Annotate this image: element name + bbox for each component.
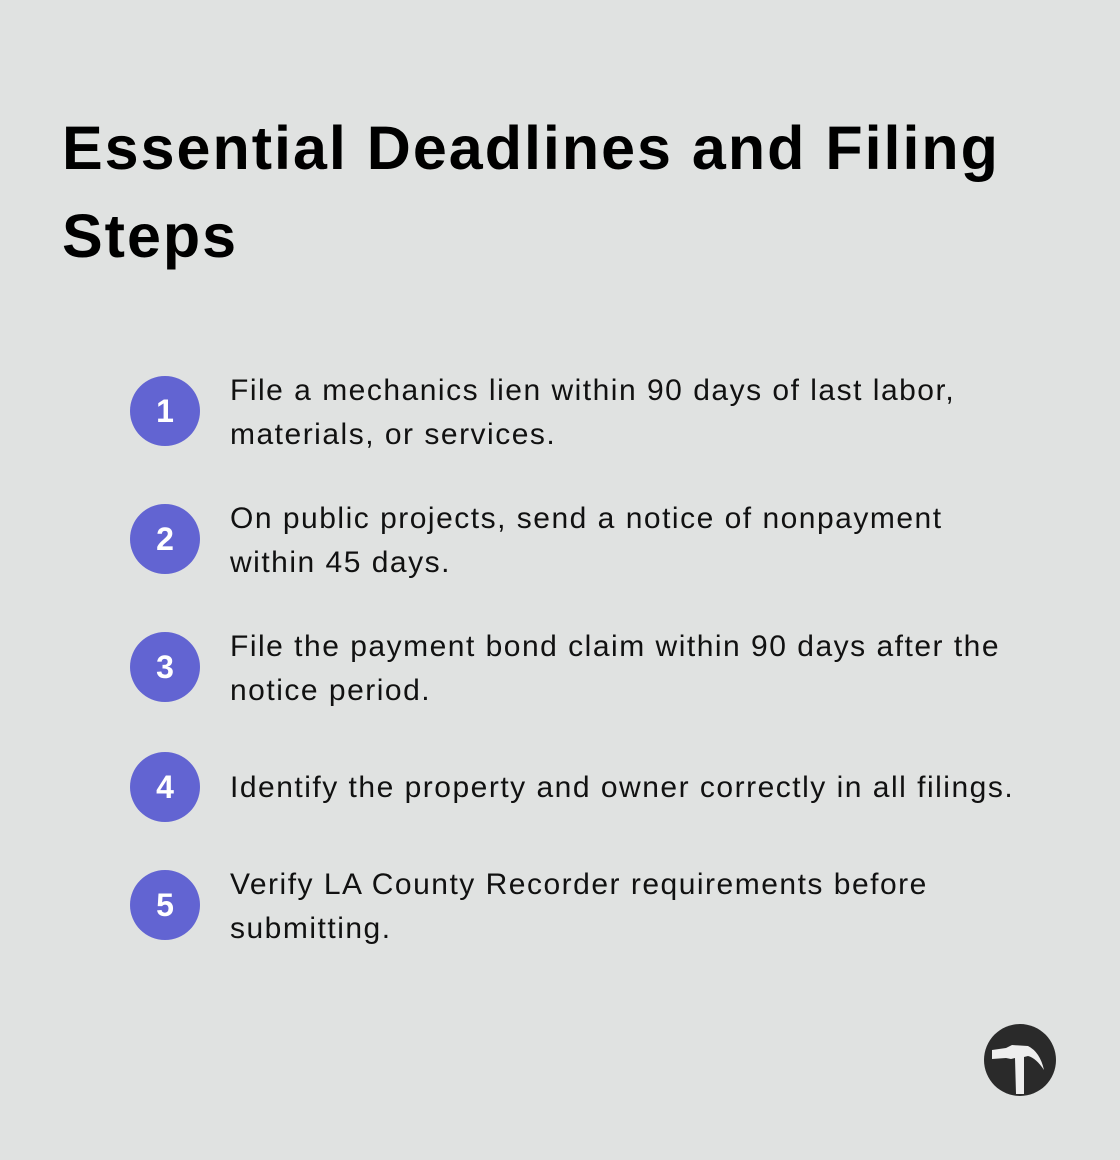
step 4: Identify the property and owner correctly in all filings.: [230, 771, 1014, 804]
step 5: Verify LA County Recorder requirements before: [230, 868, 928, 901]
step 5: submitting.: [230, 912, 392, 945]
step 4: [130, 752, 1014, 822]
step 1: 1: [156, 393, 174, 429]
step 3: File the payment bond claim within 90 days after the: [230, 630, 1000, 663]
step 4: 4: [156, 769, 174, 805]
step 3: notice period.: [230, 674, 431, 707]
step 2: 2: [156, 521, 174, 557]
step 2: within 45 days.: [230, 546, 451, 579]
step 5: [130, 868, 928, 945]
icon: hammer logo: [984, 1024, 1056, 1096]
step 3: 3: [156, 649, 174, 685]
step 3: [130, 630, 1000, 707]
step 1: File a mechanics lien within 90 days of last labor,: [230, 374, 955, 407]
step 2: [130, 502, 943, 579]
step 2: On public projects, send a notice of nonpayment: [230, 502, 943, 535]
step 1: [130, 374, 955, 451]
step 5: 5: [156, 887, 174, 923]
step 1: materials, or services.: [230, 418, 556, 451]
title: Essential Deadlines and Filing Steps: [62, 114, 1000, 270]
